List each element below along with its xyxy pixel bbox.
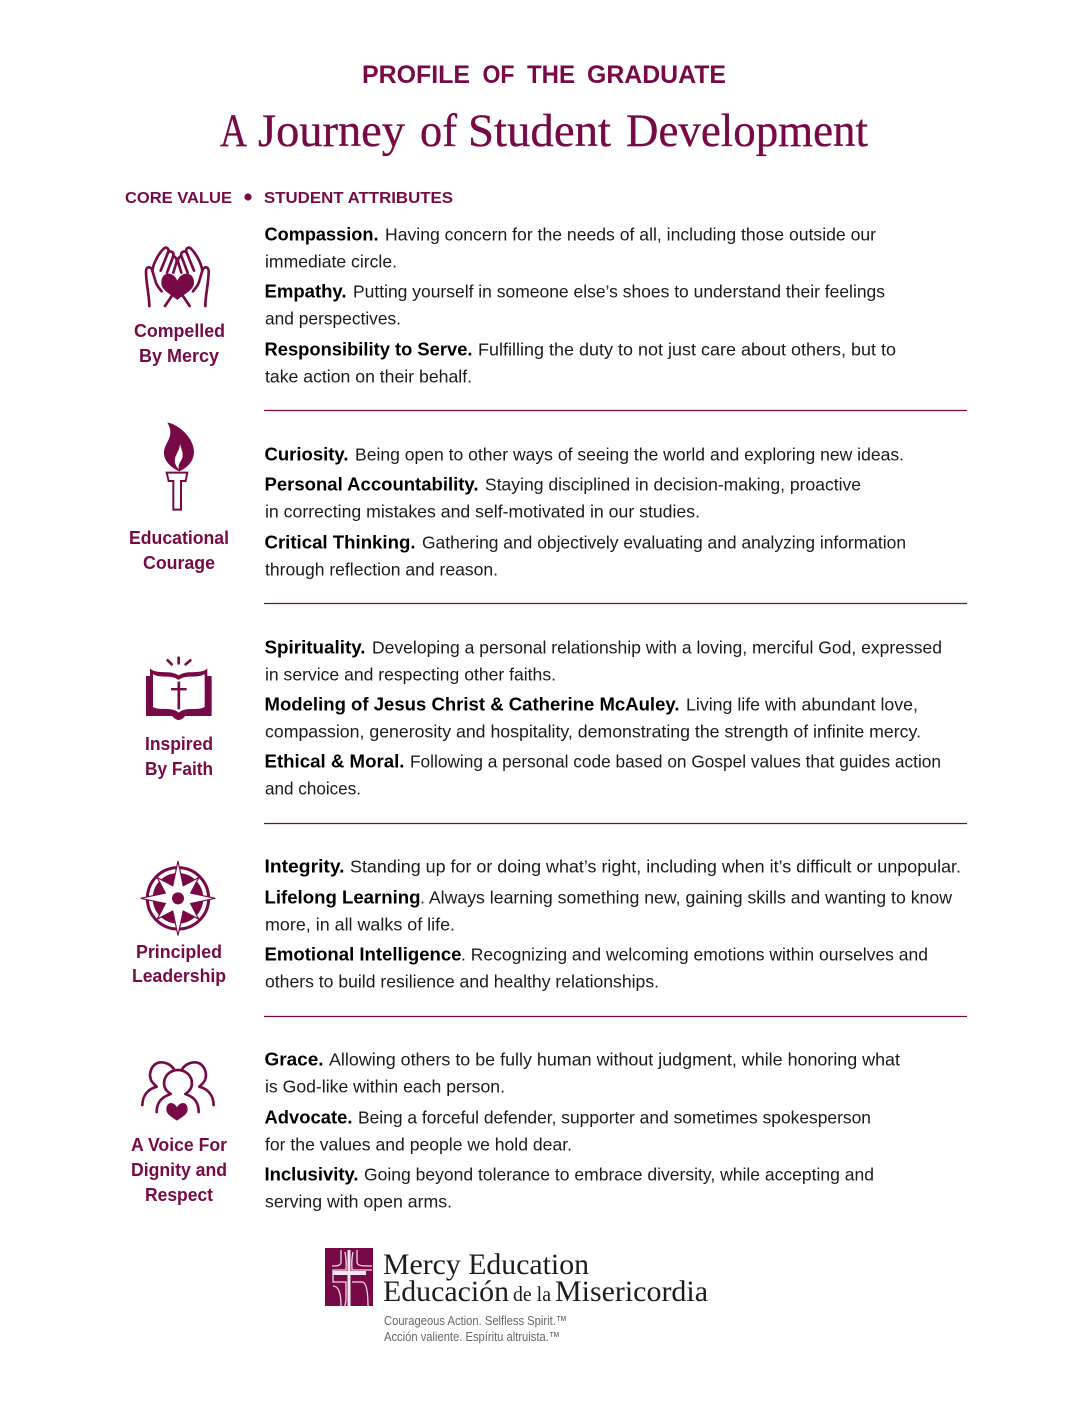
label: educational courage [129,527,229,573]
attributes: compassion, empathy, responsibility to serve: Fulfilling the duty to not just care about others, but to [478,340,896,360]
icon: hands holding a heart [146,248,209,306]
attributes: integrity, lifelong learning, emotional intelligence: Integrity. [264,857,344,877]
attributes: grace, advocate, inclusivity: Being a forceful defender, supporter and sometimes spokesperson [358,1108,871,1128]
title: a journey of student development: A [220,105,247,157]
attributes: grace, advocate, inclusivity [264,1050,900,1212]
attributes: integrity, lifelong learning, emotional intelligence: Emotional Intelligence [264,945,462,965]
heading: profile of the graduate: GRADUATE [587,61,726,89]
attributes: curiosity, personal accountability, critical thinking [264,445,906,580]
attributes: curiosity, personal accountability, critical thinking: Critical Thinking. [264,533,416,553]
attributes: integrity, lifelong learning, emotional intelligence: Standing up for or doing what’s right, including when it’s difficult or unpopular. [350,857,961,877]
icon: compass rose [141,861,215,936]
attributes: spirituality, modeling of jesus christ and catherine mcauley, ethical and moral: Following a personal code based on Gospel values that guides action [410,752,941,772]
attributes: compassion, empathy, responsibility to serve: take action on their behalf. [265,367,472,387]
attributes: compassion, empathy, responsibility to serve: Empathy. [264,282,346,302]
attributes: compassion, empathy, responsibility to serve [264,225,896,387]
label: compelled by mercy: By Mercy [139,345,220,366]
attributes: integrity, lifelong learning, emotional intelligence: . Recognizing and welcoming emotions within ourselves and [461,945,928,965]
label: a voice for dignity and respect: Respect [145,1184,213,1205]
title: a journey of student development [220,105,868,157]
title: a journey of student development: Journey [258,105,405,157]
attributes: spirituality, modeling of jesus christ and catherine mcauley, ethical and moral: Modeling of Jesus Christ & Catherine McAuley. [264,695,680,715]
logo wordmark: Mercy Education [383,1248,589,1281]
label: a voice for dignity and respect [131,1134,227,1205]
label: inspired by faith: Inspired [145,733,213,754]
title: a journey of student development: of [420,105,457,157]
attributes: grace, advocate, inclusivity: serving with open arms. [265,1192,452,1212]
attributes: curiosity, personal accountability, critical thinking: Personal Accountability. [264,475,478,495]
logo tagline: Courageous Action. Selfless Spirit.™ [384,1313,567,1328]
attributes: grace, advocate, inclusivity: Inclusivity. [264,1165,358,1185]
label: principled leadership: Leadership [132,965,226,986]
heading: profile of the graduate: THE [527,61,575,89]
column heading: core value and student attributes [125,190,453,207]
attributes: integrity, lifelong learning, emotional intelligence [264,857,961,992]
label: educational courage: Educational [129,527,229,548]
attributes: spirituality, modeling of jesus christ and catherine mcauley, ethical and moral: Ethical & Moral. [264,752,404,772]
column heading: core value and student attributes: CORE VALUE [125,190,232,207]
attributes: curiosity, personal accountability, critical thinking: Curiosity. [264,445,348,465]
icon: torch [164,422,194,510]
label: compelled by mercy: Compelled [134,320,225,341]
icon: three people with heart [142,1062,214,1121]
attributes: curiosity, personal accountability, critical thinking: through reflection and reason. [265,560,498,580]
attributes: integrity, lifelong learning, emotional intelligence: more, in all walks of life. [265,915,455,935]
attributes: compassion, empathy, responsibility to serve: Having concern for the needs of all, including those outside our [385,225,876,245]
attributes: spirituality, modeling of jesus christ and catherine mcauley, ethical and moral: compassion, generosity and hospitality, demonstrating the strength of infinite mercy. [265,722,921,742]
attributes: spirituality, modeling of jesus christ and catherine mcauley, ethical and moral: Spirituality. [264,638,366,658]
logo wordmark: de la [513,1282,552,1306]
attributes: spirituality, modeling of jesus christ and catherine mcauley, ethical and moral: and choices. [265,779,361,799]
attributes: spirituality, modeling of jesus christ and catherine mcauley, ethical and moral [264,638,942,799]
attributes: spirituality, modeling of jesus christ and catherine mcauley, ethical and moral: in service and respecting other faiths. [265,665,556,685]
attributes: spirituality, modeling of jesus christ and catherine mcauley, ethical and moral: Developing a personal relationship with a loving, merciful God, expressed [372,638,942,658]
title: a journey of student development: Development [626,105,868,157]
panel: a voice for dignity and respect [131,1050,900,1212]
attributes: grace, advocate, inclusivity: Grace. [264,1050,324,1070]
panel: compelled by mercy [134,225,896,387]
attributes: grace, advocate, inclusivity: Going beyond tolerance to embrace diversity, while accepting and [364,1165,874,1185]
panel: educational courage [129,422,906,580]
attributes: spirituality, modeling of jesus christ and catherine mcauley, ethical and moral: Living life with abundant love, [686,695,918,715]
label: compelled by mercy [134,320,225,366]
attributes: curiosity, personal accountability, critical thinking: Being open to other ways of seeing the world and exploring new ideas. [355,445,904,465]
attributes: compassion, empathy, responsibility to serve: immediate circle. [265,252,397,272]
logo wordmark [383,1248,708,1308]
label: inspired by faith: By Faith [145,758,213,779]
attributes: grace, advocate, inclusivity: is God-like within each person. [265,1077,505,1097]
logo wordmark: Educación [383,1275,509,1308]
logo tagline [384,1313,567,1344]
attributes: integrity, lifelong learning, emotional intelligence: . Always learning something new, gaining skills and wanting to know [420,888,952,908]
attributes: integrity, lifelong learning, emotional intelligence: others to build resilience and healthy relationships. [265,972,659,992]
title: a journey of student development: Student [468,105,611,157]
label: inspired by faith [145,733,213,779]
icon: open book with cross [146,658,212,720]
attributes: compassion, empathy, responsibility to serve: Responsibility to Serve. [264,340,472,360]
attributes: grace, advocate, inclusivity: for the values and people we hold dear. [265,1135,572,1155]
logo: mercy education [325,1248,708,1344]
label: a voice for dignity and respect: A Voice For [131,1134,227,1155]
attributes: grace, advocate, inclusivity: Advocate. [264,1108,352,1128]
panel: principled leadership [132,857,961,992]
attributes: curiosity, personal accountability, critical thinking: in correcting mistakes and self-motivated in our studies. [265,502,700,522]
attributes: grace, advocate, inclusivity: Allowing others to be fully human without judgment, while honoring what [329,1050,900,1070]
attributes: compassion, empathy, responsibility to serve: and perspectives. [265,309,401,329]
attributes: integrity, lifelong learning, emotional intelligence: Lifelong Learning [264,888,420,908]
logo tagline: Acción valiente. Espíritu altruista.™ [384,1329,560,1344]
label: principled leadership [132,941,226,986]
attributes: compassion, empathy, responsibility to serve: Compassion. [264,225,378,245]
column heading: core value and student attributes: STUDENT ATTRIBUTES [264,190,453,207]
panel: inspired by faith [145,638,942,799]
heading: profile of the graduate [362,61,726,89]
label: principled leadership: Principled [136,941,222,962]
label: a voice for dignity and respect: Dignity and [131,1159,227,1180]
heading: profile of the graduate: OF [482,61,514,89]
attributes: compassion, empathy, responsibility to serve: Putting yourself in someone else’s shoes to understand their feelings [353,282,885,302]
heading: profile of the graduate: PROFILE [362,61,470,89]
attributes: curiosity, personal accountability, critical thinking: Gathering and objectively evaluating and analyzing information [422,533,906,553]
logo wordmark: Misericordia [555,1275,708,1308]
attributes: curiosity, personal accountability, critical thinking: Staying disciplined in decision-making, proactive [485,475,861,495]
label: educational courage: Courage [143,552,215,573]
icon: logo cross square [325,1248,373,1306]
